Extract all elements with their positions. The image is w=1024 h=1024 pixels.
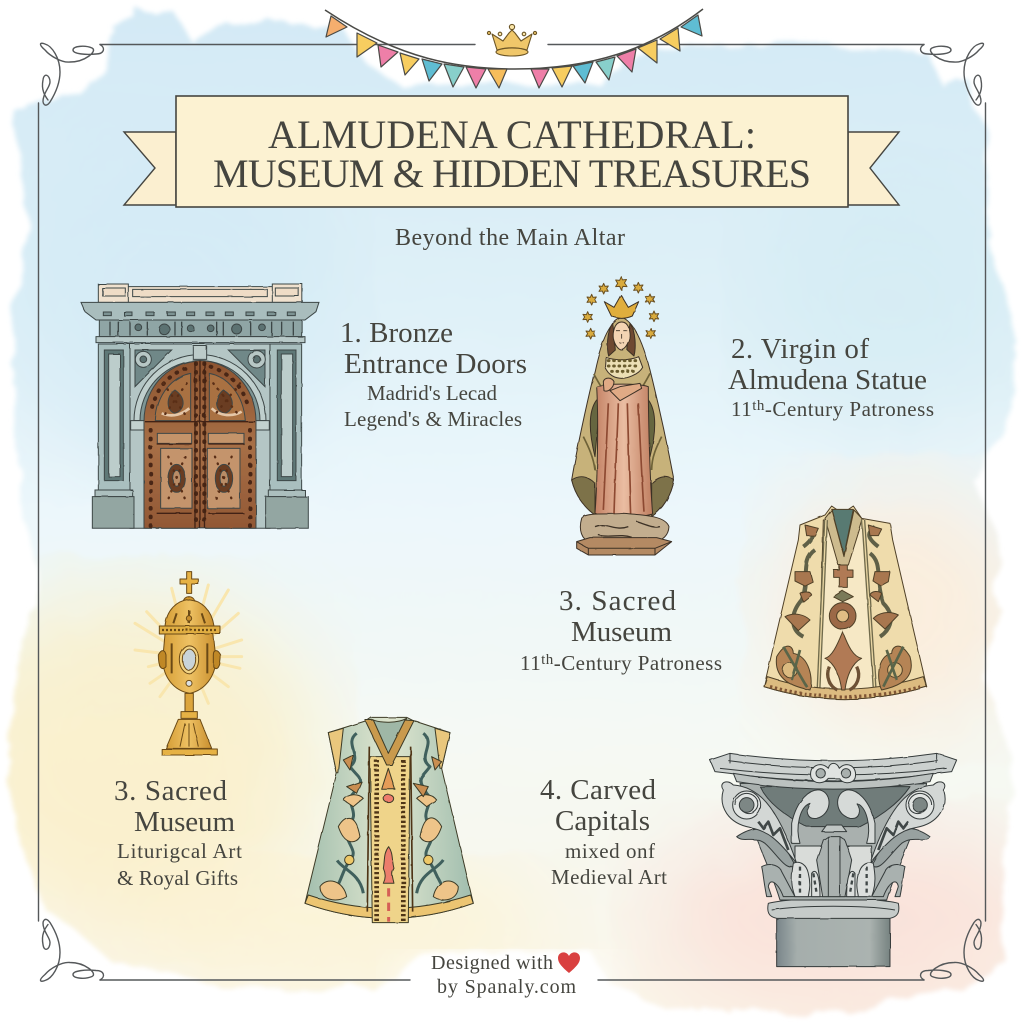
illustration: green embroidered vestment: [305, 717, 473, 923]
item 1 text: bronze doors: 1. Bronze: [340, 317, 453, 349]
item 1 text: bronze doors: Entrance Doors: [344, 348, 527, 380]
footer credit: Designed with: [431, 952, 553, 974]
item 4 text: carved capitals: 4. Carved: [540, 774, 656, 806]
item 3 text: sacred museum, right: -Century Patroness: [554, 651, 722, 675]
item 3 text: sacred museum, left: [114, 775, 242, 890]
illustration: golden monstrance: [135, 572, 242, 755]
title: ALMUDENA CATHEDRAL:: [268, 112, 756, 157]
item 4 text: carved capitals: [540, 774, 667, 889]
footer credit: by Spanaly.com: [437, 976, 576, 998]
title banner: [124, 96, 899, 207]
item 3 text: sacred museum, left: & Royal Gifts: [117, 866, 238, 890]
item 3 text: sacred museum, left: Museum: [134, 806, 235, 838]
item 1 text: bronze doors: [340, 317, 527, 431]
item 3 text: sacred museum, right: 3. Sacred: [559, 585, 676, 617]
item 1 text: bronze doors: Madrid's Lecad: [367, 381, 498, 405]
icon: heart: [558, 952, 580, 973]
illustration: bronze entrance doors: [81, 284, 319, 528]
icon: glow rays: [135, 585, 242, 703]
illustration: Virgin of Almudena statue: [572, 277, 674, 555]
subtitle: Beyond the Main Altar: [395, 225, 625, 251]
item 1 text: bronze doors: Legend's & Miracles: [344, 407, 522, 431]
icon: halo stars: [616, 277, 627, 290]
bunting garland: [325, 9, 703, 88]
item 4 text: carved capitals: mixed onf: [565, 839, 655, 863]
item 3 text: sacred museum, left: Liturigcal Art: [117, 839, 242, 863]
item 4 text: carved capitals: Capitals: [555, 805, 650, 837]
item 2 text: Virgin statue: Almudena Statue: [728, 364, 927, 396]
item 2 text: Virgin statue: [728, 333, 934, 421]
icon: crown: [487, 24, 537, 56]
illustration: Corinthian carved capital: [710, 753, 957, 967]
item 2 text: Virgin statue: th: [752, 398, 765, 414]
title: [213, 112, 811, 196]
item 3 text: sacred museum, right: 11: [520, 651, 541, 675]
illustration: cream embroidered chasuble: [764, 506, 927, 699]
item 2 text: Virgin statue: 11: [731, 397, 752, 421]
item 3 text: sacred museum, right: th: [541, 652, 554, 668]
item 3 text: sacred museum, left: 3. Sacred: [114, 775, 228, 807]
footer credit: [431, 952, 580, 998]
item 3 text: sacred museum, right: Museum: [571, 616, 672, 648]
item 2 text: Virgin statue: 2. Virgin of: [731, 333, 869, 365]
item 3 text: sacred museum, right: [520, 585, 722, 675]
title: MUSEUM & HIDDEN TREASURES: [213, 151, 811, 196]
item 2 text: Virgin statue: -Century Patroness: [765, 397, 934, 421]
item 4 text: carved capitals: Medieval Art: [551, 865, 667, 889]
